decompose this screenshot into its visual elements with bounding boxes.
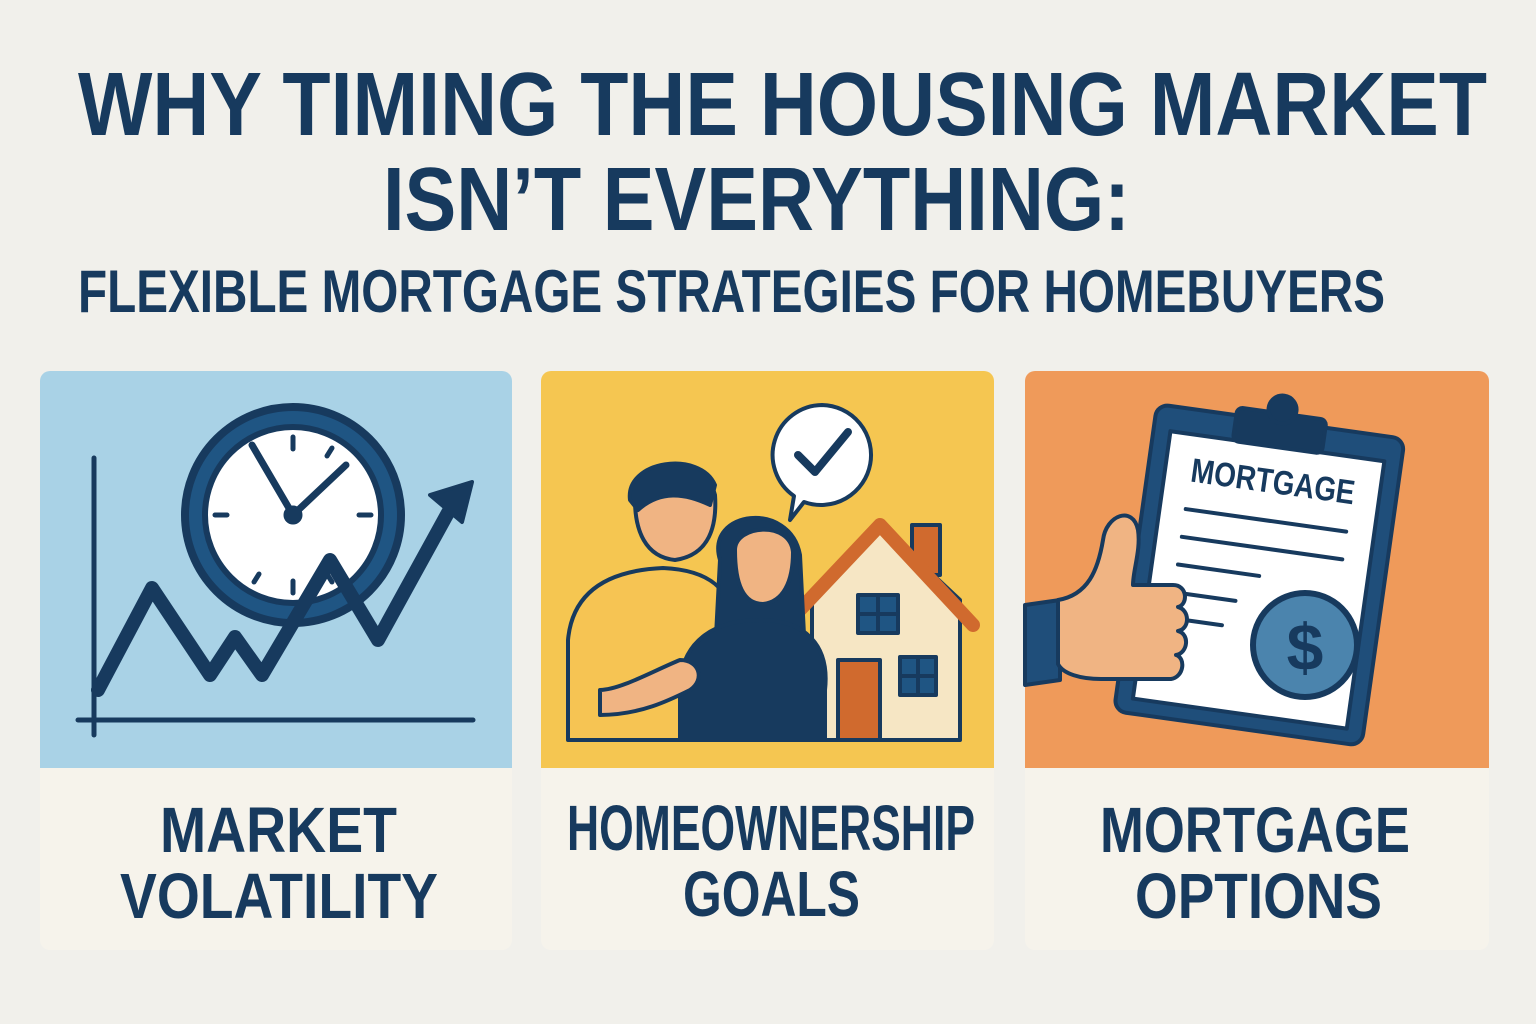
- label: market volatility: MARKET: [160, 794, 397, 866]
- title: [78, 55, 1487, 250]
- panel: market volatility: [40, 371, 512, 950]
- panel: homeownership goals: [541, 371, 994, 950]
- label: homeownership goals: GOALS: [683, 858, 860, 930]
- label: homeownership goals: HOMEOWNERSHIP: [567, 792, 975, 864]
- man: [568, 568, 733, 740]
- label: market volatility: VOLATILITY: [120, 860, 438, 932]
- icon: couple and house: [568, 405, 973, 740]
- icon: chart with clock: [78, 407, 473, 735]
- house: [912, 525, 940, 575]
- label: mortgage options: OPTIONS: [1135, 860, 1382, 932]
- hand: [1025, 600, 1060, 685]
- speech bubble: [773, 405, 871, 520]
- label: market volatility: [120, 794, 438, 932]
- icon: mortgage clipboard: [1025, 378, 1408, 746]
- woman: [715, 518, 805, 655]
- label: mortgage options: MORTGAGE: [1100, 794, 1410, 866]
- label: mortgage options: [1100, 794, 1410, 932]
- icon: mortgage clipboard: $: [1287, 610, 1323, 684]
- label: homeownership goals: [567, 792, 975, 930]
- panel: mortgage options: [1025, 371, 1489, 950]
- icon: mortgage clipboard: MORTGAGE: [1189, 452, 1357, 512]
- title: ISN’T EVERYTHING:: [383, 150, 1130, 250]
